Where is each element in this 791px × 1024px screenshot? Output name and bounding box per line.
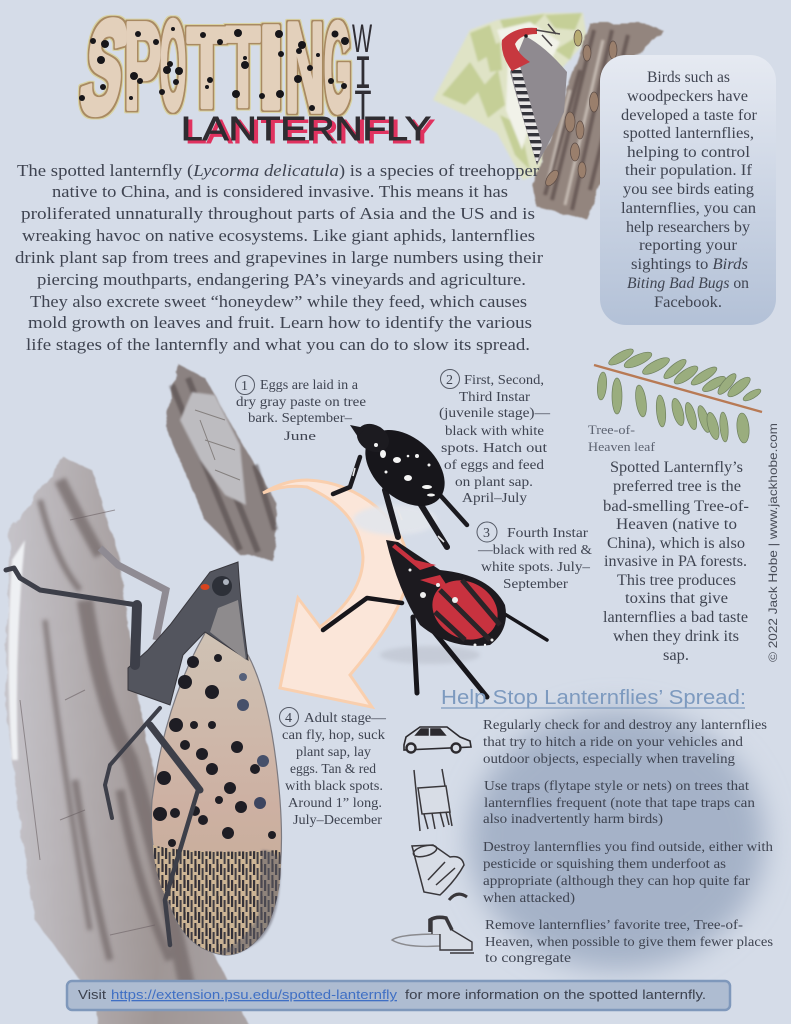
tree trunk [5, 458, 256, 1024]
illustration: red fourth instar nymph [323, 540, 547, 697]
step 2: first to third instar: First, Second, [464, 373, 544, 388]
heading: Help Stop Lanternflies’ Spread: [441, 687, 746, 709]
footer text: Visit [78, 987, 106, 1002]
title word: with: T [354, 85, 372, 134]
footer callout [67, 981, 730, 1010]
text: birds note: their population. If [625, 162, 753, 179]
number 1: 1 [241, 379, 248, 394]
text: tree of heaven: This tree produces [617, 572, 736, 589]
step 2: first to third instar: April–July [462, 491, 527, 506]
step 2: first to third instar: Third Instar [459, 390, 530, 405]
number 4: 4 [285, 711, 292, 726]
text: tip 1 [483, 717, 767, 766]
step 3: fourth instar: September [503, 577, 568, 592]
illustration: tree-of-heaven leaf [588, 346, 762, 454]
step 4: adult: can fly, hop, suck [282, 728, 385, 743]
text: introduction: They also excrete sweet “honeydew” while they feed, which causes [30, 292, 527, 311]
text: birds note: Biting Bad Bugs on [627, 275, 749, 292]
step 4: adult: plant sap, lay [296, 745, 371, 760]
text: tip 4: to congregate [485, 950, 571, 965]
text: tip 2: also inadvertently harm birds) [483, 811, 663, 826]
text: tip 1: that try to hitch a ride on your vehicles and [483, 734, 743, 749]
text: introduction: drink plant sap from trees and grapevines in large numbers using their [15, 248, 543, 267]
credit: © 2022 Jack Hobe | www.jackhobe.com [766, 423, 780, 662]
title word: Spotting: T [226, 3, 260, 130]
step 1: eggs: dry gray paste on tree [236, 395, 366, 410]
step 4: adult: July–December [293, 813, 382, 828]
illustration: egg mass on bark [165, 364, 278, 560]
text: introduction: life stages of the lanternfly and what you can do to slow its spread. [26, 335, 530, 354]
small lanternflies on trunk [543, 30, 617, 188]
leaf caption: Heaven leaf [588, 439, 656, 454]
text: introduction: native to China, and is considered invasive. This means it has [52, 182, 508, 201]
number 3: 3 [483, 526, 490, 541]
step 2: first to third instar: (juvenile stage)— [439, 406, 551, 421]
text: tip 4 [485, 917, 773, 965]
arrow: life cycle direction [263, 480, 408, 707]
title word: Spotting: T [187, 5, 226, 132]
step 2: first to third instar [439, 370, 551, 506]
text: introduction: piercing mouthparts, endangering PA’s vineyards and agriculture. [37, 270, 526, 289]
step 2: first to third instar: on plant sap. [455, 475, 533, 490]
text: tree of heaven: bad-smelling Tree-of- [603, 498, 749, 515]
text: tree of heaven: China), which is also [607, 535, 745, 552]
text: introduction: The spotted lanternfly ( Lycorma delicatula ) is a species of treehopper [17, 161, 539, 180]
title word: Spotting [71, 0, 351, 142]
panel: birds as predators [600, 55, 776, 325]
text: tree of heaven: sap. [663, 647, 689, 664]
step 2: first to third instar: of eggs and feed [444, 458, 544, 473]
step 3: fourth instar: white spots. July– [481, 560, 591, 575]
leaf caption: Tree-of- [588, 422, 635, 437]
step 2: first to third instar: spots. Hatch out [441, 441, 547, 456]
text: birds note: sightings to Birds [631, 256, 748, 273]
text: birds note: you see birds eating [623, 181, 754, 198]
text: tree of heaven: lanternflies a bad taste [603, 609, 748, 626]
text: tip 1: Regularly check for and destroy any lanternflies [483, 717, 767, 732]
text: birds note: spotted lanternflies, [623, 125, 754, 142]
illustration: woodpecker eating lanternfly on trunk [433, 13, 663, 220]
title word: Spotting: N [285, 0, 324, 138]
text: tip 1: outdoor objects, especially when traveling [483, 751, 735, 766]
illustration: adult lanternfly on tree trunk [5, 458, 282, 1024]
text: birds note: help researchers by [626, 219, 750, 236]
step 1: eggs: Eggs are laid in a [260, 378, 359, 393]
title word: with [352, 16, 373, 134]
step 3: fourth instar: —black with red & [477, 543, 592, 558]
text: birds note: Birds such as [647, 69, 730, 86]
title word: Spotting: P [124, 0, 161, 135]
icon: tree trap [414, 769, 452, 831]
text: birds note [621, 69, 758, 311]
text: birds note: Facebook. [654, 294, 722, 311]
title word: Lanternfly: LANTERNFLY [181, 110, 431, 147]
text: birds note: lanternflies, you can [621, 200, 756, 217]
text: birds note: helping to control [627, 144, 750, 161]
step 4: adult: Around 1” long. [288, 796, 382, 811]
title word: Spotting: I [258, 1, 284, 133]
woodpecker body [510, 36, 567, 165]
text: tip 2: lanternflies frequent (note that tape traps can [484, 795, 755, 810]
icon: boot and bug [412, 843, 467, 900]
title word: with: I [354, 50, 372, 104]
text: tip 2 [483, 778, 755, 826]
text: tree of heaven: invasive in PA forests. [604, 553, 747, 570]
step 3: fourth instar: Fourth Instar [507, 526, 588, 541]
text: tip 3: appropriate (although they can hop quite far [483, 873, 751, 888]
footer text: https://extension.psu.edu/spotted-lanternfly [111, 987, 398, 1002]
text: tree of heaven: preferred tree is the [613, 478, 741, 495]
text: tip 3 [483, 839, 773, 905]
text: tree of heaven [603, 459, 749, 664]
panel: help stop spread [392, 687, 773, 970]
step 1: eggs: bark. September– [248, 411, 353, 426]
title word: with: W [352, 16, 373, 61]
leaf backdrop [433, 13, 587, 180]
text: introduction [15, 161, 543, 354]
footer text [78, 987, 706, 1002]
text: introduction: wreaking havoc on native ecosystems. Like giant aphids, lanternflies [22, 226, 535, 245]
text: birds note: reporting your [639, 237, 738, 254]
text: introduction: mold growth on leaves and fruit. Learn how to identify the various [28, 313, 532, 332]
step 2: first to third instar: black with white [445, 424, 544, 439]
text: introduction: proliferated unnaturally throughout parts of Asia and the US and is [21, 204, 535, 223]
step 4: adult [280, 708, 387, 828]
text: tip 4: Heaven, when possible to give them fewer places [485, 934, 773, 949]
step 1: eggs: June [284, 428, 316, 443]
legs [6, 568, 200, 945]
step 4: adult: Adult stage— [304, 711, 387, 726]
text: birds note: woodpeckers have [627, 88, 748, 105]
title: Spotting with Lanternfly [71, 0, 431, 147]
text: tree of heaven: when they drink its [613, 628, 739, 645]
text: birds note: developed a taste for [621, 107, 758, 124]
number 2: 2 [446, 373, 453, 388]
step 3: fourth instar [477, 522, 592, 592]
text: tree of heaven: Spotted Lanternfly’s [610, 459, 743, 476]
step 4: adult: with black spots. [285, 779, 383, 794]
wing with spots [151, 628, 282, 955]
leaf caption [588, 422, 656, 454]
text: tip 2: Use traps (flytape style or nets) on trees that [484, 778, 749, 793]
footer text: for more information on the spotted lanternfly. [405, 987, 706, 1002]
text: tip 3: when attacked) [483, 890, 575, 905]
title word: Spotting: G [324, 0, 351, 138]
step 1: eggs [236, 376, 366, 443]
body and head [100, 548, 248, 705]
text: tree of heaven: Heaven (native to [616, 516, 737, 533]
text: tip 3: pesticide or squishing them underfoot as [483, 856, 726, 871]
text: tip 4: Remove lanternflies’ favorite tree, Tree-of- [485, 917, 744, 932]
step 4: adult: eggs. Tan & red [290, 762, 376, 777]
icon: car [404, 727, 471, 752]
text: tree of heaven: toxins that give [625, 590, 728, 607]
illustration: black nymph with white spots [333, 415, 467, 547]
trunk [533, 23, 663, 220]
text: tip 3: Destroy lanternflies you find outside, either with [483, 839, 773, 854]
icon: chainsaw [392, 917, 474, 953]
woodpecker head [502, 28, 537, 71]
